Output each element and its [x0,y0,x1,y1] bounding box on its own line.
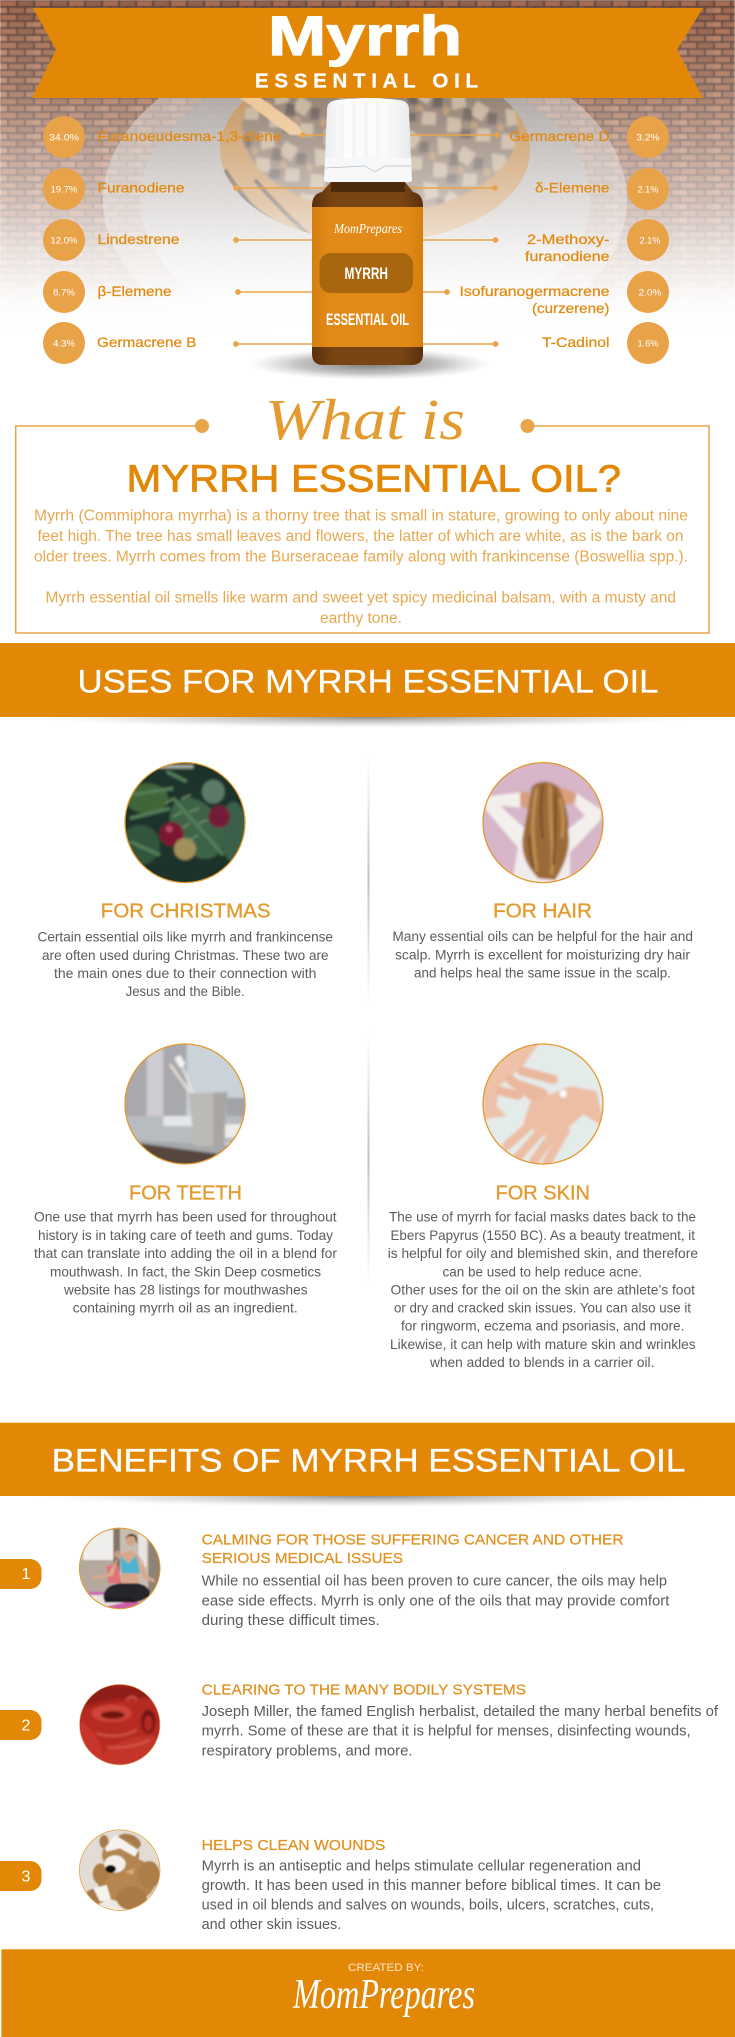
description text: earthy tone. [320,610,402,627]
photo: toothbrush cup [124,1043,246,1165]
text block [34,1209,337,1316]
benefit title: CLEARING TO THE MANY BODILY SYSTEMS [202,1681,526,1698]
benefit title: CALMING FOR THOSE SUFFERING CANCER AND OTHER [202,1532,624,1549]
banner: uses: USES FOR MYRRH ESSENTIAL OIL [78,664,658,700]
text block: the main ones due to their connection with [54,965,316,981]
heading: Myrrh Essential Oil?: MYRRH ESSENTIAL OIL? [126,459,621,501]
heading: What is: What is [265,387,465,452]
footer [1,1949,735,2037]
banner: benefits [0,1423,735,1507]
benefit title [202,1532,624,1567]
right compounds list: 2.1% [640,236,661,246]
text block: scalp. Myrrh is excellent for moisturizing dry hair [395,946,690,962]
benefit text: While no essential oil has been proven to cure cancer, the oils may help [202,1573,667,1590]
description text: older trees. Myrrh comes from the Burseraceae family along with frankincense (Boswellia spp.). [34,549,688,566]
right compounds list: furanodiene [525,248,610,264]
use: for christmas [38,760,333,999]
number tab 3: 3 [22,1868,31,1886]
left compounds list: Lindestrene [98,231,180,247]
benefit text: Joseph Miller, the famed English herbalist, detailed the many herbal benefits of [202,1703,719,1720]
use: for skin [388,1040,698,1370]
description text: Myrrh essential oil smells like warm and sweet yet spicy medicinal balsam, with a musty and [46,590,676,607]
text block [388,1209,698,1370]
text block [392,928,693,980]
left compounds list: 34.0% [49,132,80,144]
benefit text [202,1573,670,1629]
left compounds list [43,116,282,364]
text block: website has 28 listings for mouthwashes [63,1281,308,1297]
benefit text [202,1857,661,1933]
benefit 3 [0,1828,661,1933]
subtitle: Essential Oil: ESSENTIAL OIL [255,70,478,92]
benefit 2 [0,1681,719,1768]
left compounds list: 8.7% [53,288,76,298]
left compounds list: 12.0% [50,236,78,246]
text block: that can translate into adding the oil in a blend for [34,1245,337,1261]
text block: The use of myrrh for facial masks dates back to the [389,1209,696,1225]
text block: Ebers Papyrus (1550 BC). As a beauty treatment, it [390,1227,695,1243]
heading: FOR HAIR [493,901,592,923]
photo: yoga [78,1528,160,1610]
right compounds list: 1.6% [638,338,659,350]
right compounds list: (curzerene) [532,300,610,316]
header background: brick wall and bowl of myrrh [0,0,735,294]
use: for hair [392,760,693,980]
text block: is helpful for oily and blemished skin, and therefore [388,1245,698,1261]
left compounds list: 19.7% [50,184,78,196]
right compounds list: Germacrene D [510,128,610,144]
photo: red blood cells [78,1682,162,1768]
text block: when added to blends in a carrier oil. [429,1354,654,1370]
left compounds list: 4.3% [53,338,76,350]
text block [38,929,333,999]
benefit title: HELPS CLEAN WOUNDS [202,1837,385,1854]
benefit 1 [0,1526,670,1629]
right compounds list: 3.2% [636,132,660,144]
connector lines with dots [234,133,499,346]
text block: are often used during Christmas. These two are [42,947,329,963]
description text: Myrrh (Commiphora myrrha) is a thorny tree that is small in stature, growing to only about nine [34,508,688,525]
title: Myrrh: Myrrh [268,4,462,67]
left compounds list: Furanoeudesma-1,3-diene [98,128,282,144]
photo: bandaged teddy bear [78,1828,162,1913]
bottle brand: MomPrepares [333,222,402,237]
bottle label: Essential Oil: ESSENTIAL OIL [326,310,409,329]
panel: what is myrrh essential oil [16,387,709,633]
benefit text: myrrh. Some of these are that it is helpful for menses, disinfecting wounds, [202,1723,691,1740]
banner: benefits: BENEFITS OF MYRRH ESSENTIAL OIL [52,1443,685,1479]
bottle label: Myrrh: MYRRH [344,264,388,283]
text block: mouthwash. In fact, the Skin Deep cosmetics [50,1263,321,1279]
left compounds list: Germacrene B [97,334,196,350]
essential oil bottle [248,98,492,380]
benefit text: during these difficult times. [202,1612,380,1629]
text block: and helps heal the same issue in the scalp. [414,964,671,980]
photo: hands with cream [480,1040,605,1170]
description text: feet high. The tree has small leaves and flowers, the latter of which are white, as is the bark on [38,528,684,545]
heading: FOR TEETH [129,1182,242,1204]
text block: can be used to help reduce acne. [442,1263,642,1279]
brand: MomPrepares: MomPrepares [292,1972,475,2018]
right compounds list: 2.0% [638,288,662,298]
right compounds list: 2-Methoxy- [527,231,610,247]
right compounds list: T-Cadinol [542,334,610,350]
text block: for ringworm, eczema and psoriasis, and more. [401,1318,684,1334]
right compounds list: δ-Elemene [535,180,610,196]
banner: uses [0,643,735,728]
left compounds list: Furanodiene [98,180,185,196]
benefit text: Myrrh is an antiseptic and helps stimulate cellular regeneration and [202,1857,641,1874]
number tab 2 [0,1710,42,1740]
number tab 1: 1 [22,1566,31,1583]
benefit text: respiratory problems, and more. [202,1742,412,1759]
heading: FOR CHRISTMAS [101,901,270,923]
number tab 2: 2 [22,1718,31,1734]
benefit text: and other skin issues. [202,1916,341,1933]
number tab 1 [0,1559,42,1589]
description text [34,508,688,627]
benefit text [202,1703,719,1759]
text block: containing myrrh oil as an ingredient. [73,1300,298,1316]
created by label: CREATED BY: [348,1962,424,1974]
benefit title: SERIOUS MEDICAL ISSUES [202,1550,403,1567]
number tab 3 [0,1861,42,1891]
photo: long hair [480,760,605,885]
title ribbon [32,4,703,98]
right compounds list: 2.1% [638,184,659,196]
photo: christmas tree [120,760,250,885]
right compounds list: Isofuranogermacrene [460,283,610,299]
use: for teeth [34,1040,337,1316]
text block: Jesus and the Bible. [126,983,245,999]
text block: Certain essential oils like myrrh and frankincense [38,929,333,945]
text block: One use that myrrh has been used for throughout [34,1209,337,1225]
heading: FOR SKIN [496,1182,590,1204]
text block: or dry and cracked skin issues. You can also use it [394,1300,691,1316]
text block: Other uses for the oil on the skin are athlete’s foot [390,1281,695,1297]
left compounds list: β-Elemene [98,283,172,299]
text block: history is in taking care of teeth and gums. Today [38,1227,333,1243]
benefit text: used in oil blends and salves on wounds, boils, ulcers, scratches, cuts, [202,1897,654,1914]
benefit text: growth. It has been used in this manner before biblical times. It can be [202,1877,661,1894]
right compounds list [460,116,669,364]
text block: Many essential oils can be helpful for the hair and [392,928,693,944]
benefit text: ease side effects. Myrrh is only one of the oils that may provide comfort [202,1592,670,1609]
text block: Likewise, it can help with mature skin and wrinkles [390,1336,696,1352]
